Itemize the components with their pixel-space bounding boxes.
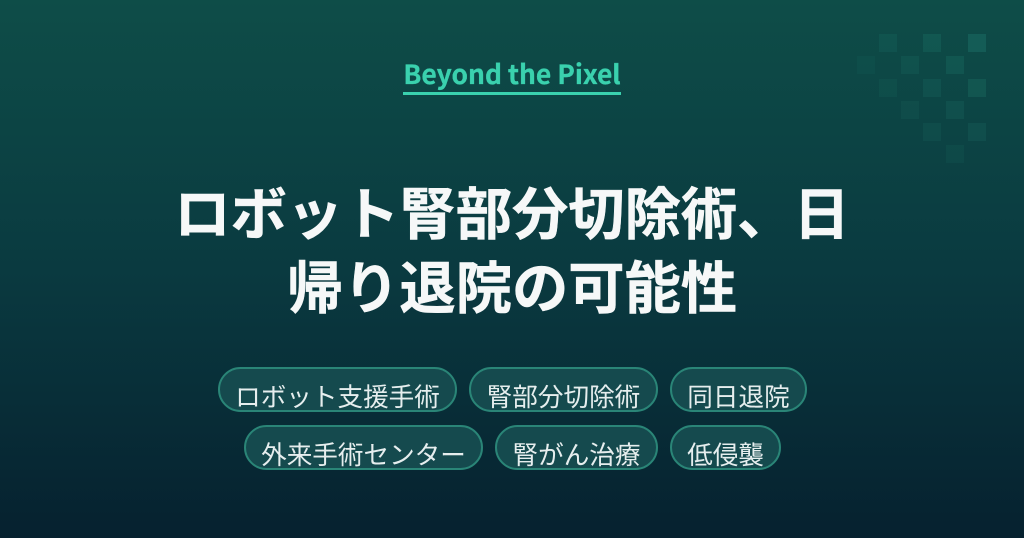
tag: 外来手術センター	[244, 425, 483, 470]
brand label: Beyond the Pixel: Beyond the Pixel	[403, 53, 621, 92]
decorative pixel grid	[879, 34, 986, 141]
tag: 腎部分切除術	[469, 367, 658, 412]
title: 帰り退院の可能性	[287, 244, 737, 325]
tag: 同日退院	[670, 367, 807, 412]
tag: 腎がん治療	[495, 425, 658, 470]
tag group	[218, 367, 807, 470]
tag: 低侵襲	[670, 425, 781, 470]
title: ロボット腎部分切除術、日	[174, 170, 850, 251]
tag: ロボット支援手術	[218, 367, 457, 412]
title	[174, 170, 850, 325]
